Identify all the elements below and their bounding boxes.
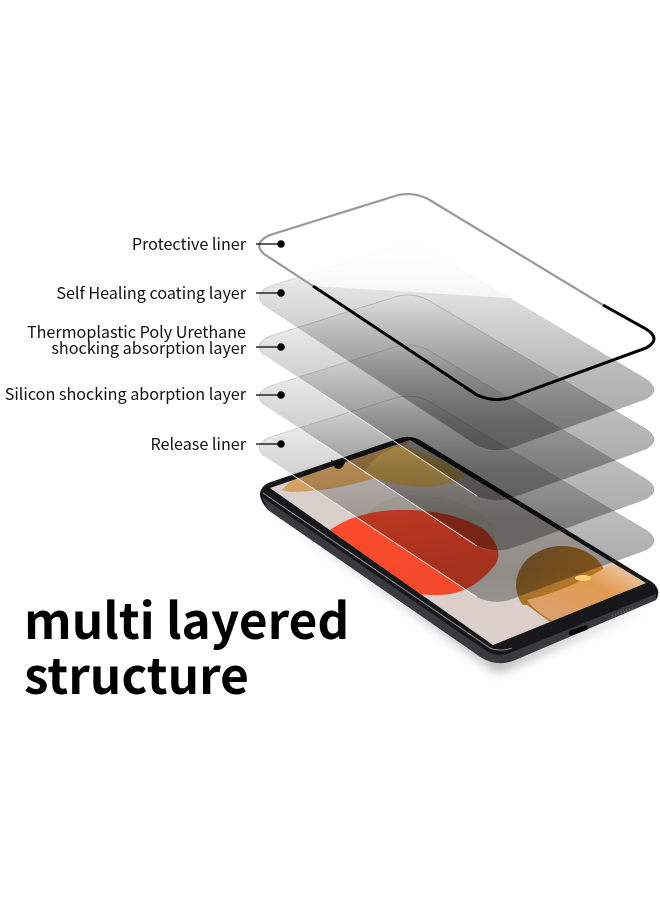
sphere highlight (575, 575, 591, 581)
title (24, 583, 349, 709)
bronze sphere (516, 546, 608, 624)
phone body (260, 437, 658, 663)
title: structure (24, 638, 249, 709)
film layer 5: release liner (259, 396, 654, 602)
film layer 4: silicon (259, 345, 654, 551)
title: multi layered (24, 583, 349, 654)
phone screen (270, 440, 646, 645)
grey frame edge (259, 194, 603, 305)
label: thermoplastic poly urethane: Thermoplastic Poly Urethane (27, 319, 246, 343)
leader: thermoplastic (256, 343, 285, 351)
leader: release liner (256, 440, 285, 448)
black frame edge (313, 286, 654, 400)
phone (260, 430, 660, 672)
orange cloth (527, 563, 646, 622)
label: protective liner: Protective liner (132, 231, 247, 255)
film layer 2: self healing (259, 245, 654, 451)
textured grey ball (370, 496, 420, 512)
label: self healing coating layer: Self Healing coating layer (56, 280, 247, 304)
film layer 1: protective liner with frame (259, 194, 654, 400)
leader: protective liner (256, 240, 285, 248)
glass glare (259, 194, 646, 328)
leader: self healing (256, 289, 285, 297)
leader: silicon (256, 391, 285, 399)
phone edge highlight (263, 493, 512, 650)
tan wallpaper shape (282, 440, 410, 492)
yellow ball (363, 446, 466, 487)
camera notch (331, 458, 346, 469)
speaker grille (612, 608, 634, 616)
lower cloth (488, 604, 550, 645)
label: thermoplastic poly urethane (27, 319, 247, 359)
red ball (330, 510, 498, 595)
label: release liner: Release liner (150, 431, 247, 455)
phone shadow (268, 505, 650, 672)
film layer 3: thermoplastic (259, 295, 654, 501)
phone frame band (262, 497, 656, 663)
charging port (568, 625, 588, 636)
label: silicon shocking aborption layer: Silicon shocking aborption layer (5, 381, 247, 405)
label: thermoplastic poly urethane: shocking absorption layer (51, 335, 247, 359)
